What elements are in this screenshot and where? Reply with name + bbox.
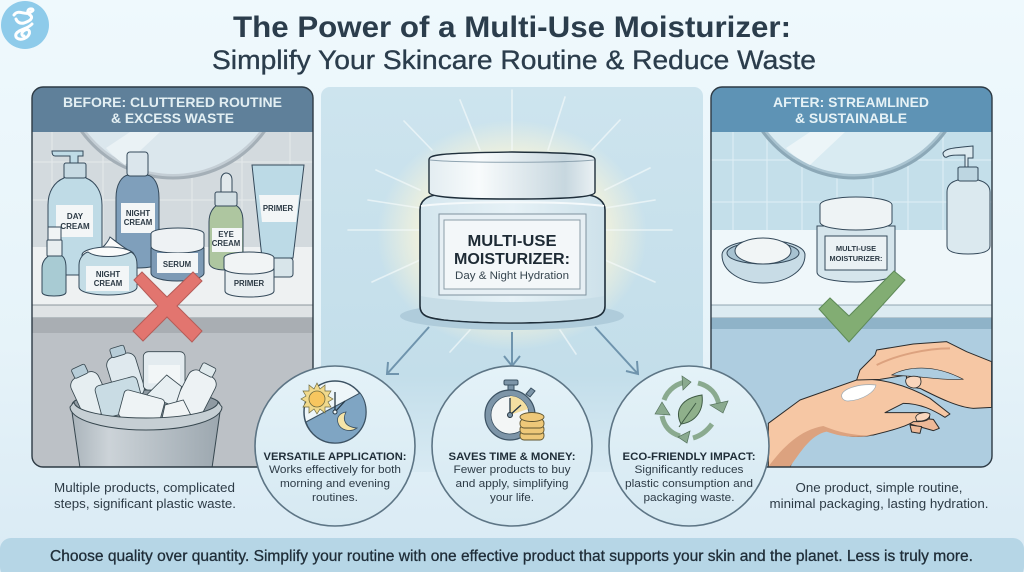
after header bar: AFTER: STREAMLINED xyxy=(773,94,929,110)
panel: before xyxy=(31,86,314,468)
benefit circle: versatile application: morning and evening xyxy=(280,478,390,490)
jar: multi-use moisturizer small: MULTI-USE xyxy=(836,244,876,253)
counter xyxy=(32,247,313,468)
bottle: small pump xyxy=(42,227,66,296)
jar: serum xyxy=(151,228,204,281)
bottle: eye cream dropper xyxy=(209,173,243,270)
bottle: day cream: CREAM xyxy=(60,222,90,231)
cream dollop xyxy=(842,385,876,401)
counter xyxy=(711,230,992,469)
jar: multi-use moisturizer small xyxy=(817,197,895,282)
before header bar: BEFORE: CLUTTERED ROUTINE xyxy=(63,94,282,110)
jar label: MOISTURIZER: xyxy=(454,251,570,268)
jar: primer: PRIMER xyxy=(234,279,265,288)
title xyxy=(212,11,816,75)
before header bar: & EXCESS WASTE xyxy=(111,110,234,126)
jar: multi-use moisturizer small: MOISTURIZER: xyxy=(830,254,882,263)
glow behind jar xyxy=(377,120,647,350)
jar: multi-use moisturizer xyxy=(420,152,605,323)
jar: open night cream: CREAM xyxy=(94,279,122,288)
caption: before: Multiple products, complicated xyxy=(54,480,235,495)
icon: sun and moon clock xyxy=(301,381,366,443)
benefit circle: eco-friendly impact: ECO-FRIENDLY IMPACT: xyxy=(622,451,756,463)
green check mark xyxy=(819,271,905,342)
tube: primer xyxy=(252,165,304,277)
red X mark xyxy=(133,272,202,342)
pump bottle xyxy=(943,146,990,254)
bottle: day cream: DAY xyxy=(67,212,84,221)
hands applying cream xyxy=(768,342,992,467)
benefit circle: versatile application: VERSATILE APPLICATION: xyxy=(264,451,406,463)
mirror xyxy=(761,132,947,180)
jar: primer xyxy=(224,252,274,297)
light rays xyxy=(348,90,672,354)
mirror xyxy=(80,132,266,180)
caption: after: minimal packaging, lasting hydration. xyxy=(770,496,988,511)
benefit circle: eco-friendly impact: Significantly reduces xyxy=(634,464,744,476)
icon: stopwatch and coins xyxy=(485,380,544,440)
jar: open night cream: NIGHT xyxy=(96,270,120,279)
bottle: day cream xyxy=(48,151,102,275)
tube: primer: PRIMER xyxy=(263,204,294,213)
title: Simplify Your Skincare Routine & Reduce Waste xyxy=(212,45,816,75)
jar shadow xyxy=(400,302,624,330)
jar: open night cream xyxy=(79,237,137,295)
panel: after xyxy=(710,86,993,468)
wall tiles xyxy=(32,130,313,250)
benefit circle: versatile application: Works effectively for both xyxy=(269,464,401,476)
jar label: Day & Night Hydration xyxy=(455,270,569,282)
caption: after xyxy=(770,480,988,511)
caption: before xyxy=(54,480,236,511)
benefit circle: eco-friendly impact xyxy=(609,366,769,526)
arrows from jar to benefits xyxy=(387,327,638,374)
jar: serum: SERUM xyxy=(163,260,191,269)
bottom banner: Choose quality over quantity. Simplify your routine with one effective product that supports your skin and the planet. Less is truly more. xyxy=(50,548,973,565)
bottle: night cream xyxy=(116,152,159,268)
bottle: eye cream dropper: EYE xyxy=(218,230,234,239)
title: The Power of a Multi-Use Moisturizer: xyxy=(233,11,791,44)
bottle: night cream: CREAM xyxy=(124,218,152,227)
benefit circle: saves time and money: SAVES TIME & MONEY: xyxy=(448,451,576,463)
benefit circle: saves time and money: and apply, simplifying xyxy=(456,478,568,490)
soap dish xyxy=(722,238,805,283)
bottle: night cream: NIGHT xyxy=(126,209,150,218)
jar label xyxy=(439,214,586,295)
benefit circle: saves time and money xyxy=(432,366,592,526)
panel: center hero xyxy=(321,87,703,472)
after header bar xyxy=(711,87,992,132)
benefit circle: saves time and money: Fewer products to buy xyxy=(454,464,571,476)
wall tiles xyxy=(711,130,992,232)
logo xyxy=(1,1,49,49)
bottle: eye cream dropper: CREAM xyxy=(212,239,240,248)
benefit circle: eco-friendly impact: plastic consumption and xyxy=(625,478,753,490)
icon: recycling arrows and leaf xyxy=(655,376,728,443)
benefit circle: eco-friendly impact: packaging waste. xyxy=(644,492,734,504)
benefit circle: versatile application xyxy=(255,366,415,526)
caption: before: steps, significant plastic waste. xyxy=(54,496,236,511)
caption: after: One product, simple routine, xyxy=(796,480,962,495)
after header bar: & SUSTAINABLE xyxy=(795,110,907,126)
benefit circle: saves time and money: your life. xyxy=(490,492,534,504)
jar label: MULTI-USE xyxy=(468,233,557,250)
benefit circle: versatile application: routines. xyxy=(312,492,358,504)
trash bin with empty containers xyxy=(64,343,223,468)
bottom banner xyxy=(0,538,1024,572)
before header bar xyxy=(32,87,313,132)
